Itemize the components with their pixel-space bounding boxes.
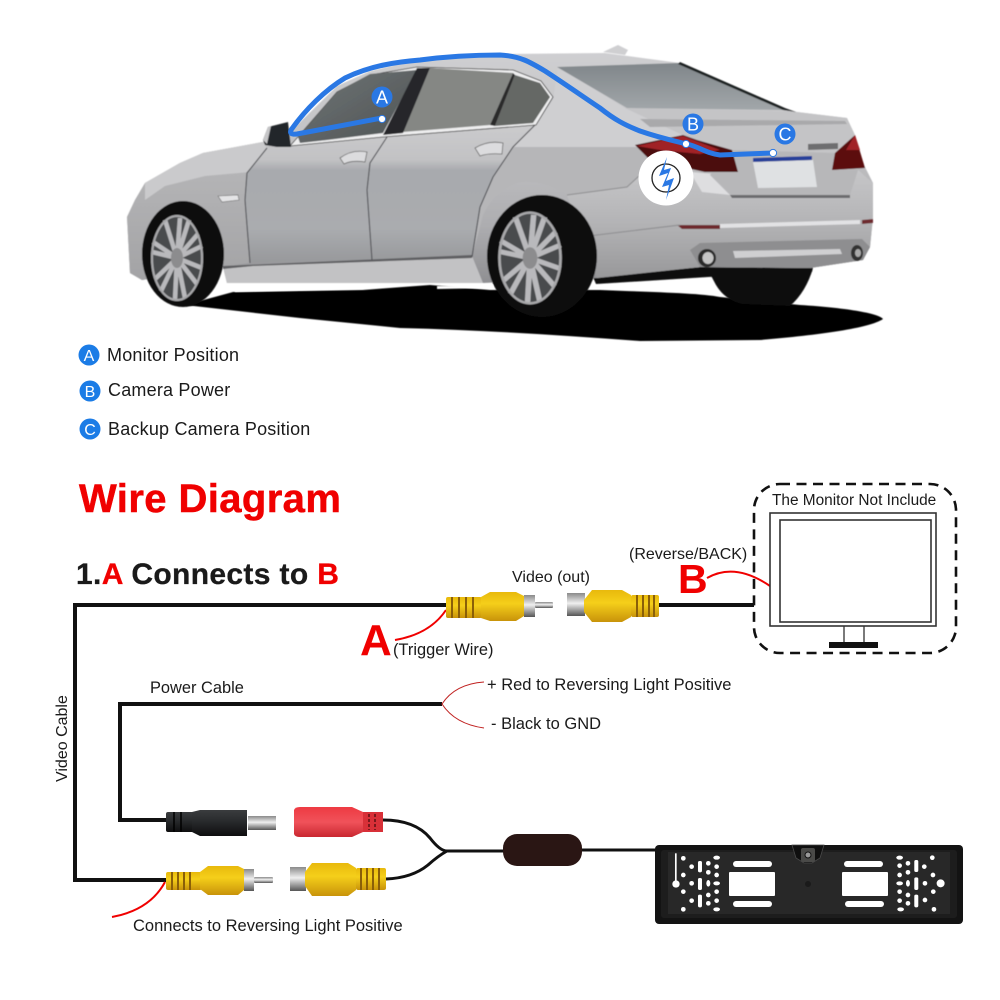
yellow male RCA top: [446, 592, 553, 621]
hood highlight: [145, 142, 267, 200]
bumper strip: [720, 220, 860, 228]
right tail light: [832, 135, 865, 170]
badge: [808, 143, 838, 150]
marker B: [682, 114, 704, 148]
underbody: [593, 266, 813, 284]
window chrome surround: [290, 67, 553, 146]
yellow female RCA bottom: [290, 863, 386, 896]
side mirror: [263, 122, 291, 147]
monitor box: [754, 484, 956, 653]
car illustration: [127, 45, 873, 317]
licence plate: [753, 160, 817, 188]
rear wheel rim: [498, 212, 562, 304]
legend item C: Backup Camera Position: [108, 419, 310, 439]
red pointer bottom: [112, 882, 165, 917]
video cable wire: [75, 605, 446, 880]
rocker panel: [223, 256, 483, 283]
lower valance: [690, 239, 870, 268]
power cable wire: [120, 704, 442, 820]
exhausts: [698, 249, 716, 267]
marker A: A: [376, 88, 388, 108]
camera module: [792, 845, 824, 863]
antenna: [603, 45, 628, 55]
split power leads: [442, 682, 484, 728]
ground shadow: [185, 285, 883, 341]
heading: step 1: 1.A Connects to B: [76, 558, 339, 591]
inline module and cable: [503, 834, 656, 866]
front wheel tyre: [142, 201, 224, 307]
marker B: B: [687, 114, 699, 134]
big letter A: A: [360, 616, 392, 665]
far rear wheel: [708, 268, 813, 306]
label: Video out: Video (out): [512, 569, 590, 586]
front side window: [298, 70, 417, 143]
legend: [78, 344, 310, 440]
red pointer A: [395, 610, 446, 640]
front fender: [127, 142, 267, 280]
doors: [245, 125, 535, 263]
marker A: [372, 86, 392, 123]
rear wheel tyre: [487, 195, 597, 317]
black DC plug: [166, 810, 276, 836]
big letter B: B: [678, 556, 708, 602]
plate centre: [668, 852, 950, 914]
licence plate camera: [655, 845, 963, 924]
marker C: [769, 124, 796, 157]
highlight near tail light: [690, 172, 738, 195]
red DC socket: [294, 807, 383, 837]
rear fender upper: [513, 67, 683, 147]
rear quarter window: [495, 75, 550, 126]
label: red lead: + Red to Reversing Light Positive: [487, 676, 731, 694]
marker C: C: [778, 124, 792, 144]
blue wire route: [291, 55, 773, 155]
rear window: [557, 63, 785, 110]
label: black lead: - Black to GND: [491, 715, 601, 733]
left tail light: [635, 135, 738, 172]
rear bumper side: [567, 165, 873, 278]
label: Reverse BACK: (Reverse/BACK): [629, 546, 747, 563]
legend item B: Camera Power: [108, 380, 230, 400]
yellow female RCA top: [567, 590, 659, 622]
door handles: [340, 151, 367, 164]
legend item C: C: [84, 422, 96, 439]
car body: [127, 53, 873, 283]
trunk rear panel: [710, 150, 858, 195]
icon: power bolt: [638, 150, 694, 206]
yellow male RCA bottom: [166, 866, 273, 895]
b pillar: [383, 68, 430, 135]
red pointer B: [707, 572, 770, 586]
legend item A: A: [84, 348, 95, 365]
legend item A: Monitor Position: [107, 345, 239, 365]
car photo with wire route: [127, 45, 883, 341]
label: Power Cable: Power Cable: [150, 679, 244, 697]
plate windows: [729, 861, 888, 907]
white gaps under car: [233, 285, 363, 292]
legend item B: B: [85, 384, 95, 401]
label: Connects to Reversing Light Positive: Connects to Reversing Light Positive: [133, 917, 403, 935]
trunk lid: [625, 108, 855, 153]
monitor label: The Monitor Not Include: [772, 492, 936, 509]
label: Video Cable: Video Cable: [54, 695, 71, 782]
heading: Wire Diagram: Wire Diagram: [79, 477, 341, 521]
rear fender middle: [472, 147, 652, 257]
Y splitter cable: [383, 820, 505, 879]
door seams: [245, 125, 535, 263]
screw hole: [805, 881, 811, 887]
front wheel rim: [151, 215, 203, 301]
LED holes: [672, 853, 945, 912]
label: Trigger Wire: (Trigger Wire): [393, 641, 493, 659]
fender vent: [218, 195, 239, 202]
rear door window: [403, 68, 513, 132]
monitor input wire: [658, 603, 754, 607]
